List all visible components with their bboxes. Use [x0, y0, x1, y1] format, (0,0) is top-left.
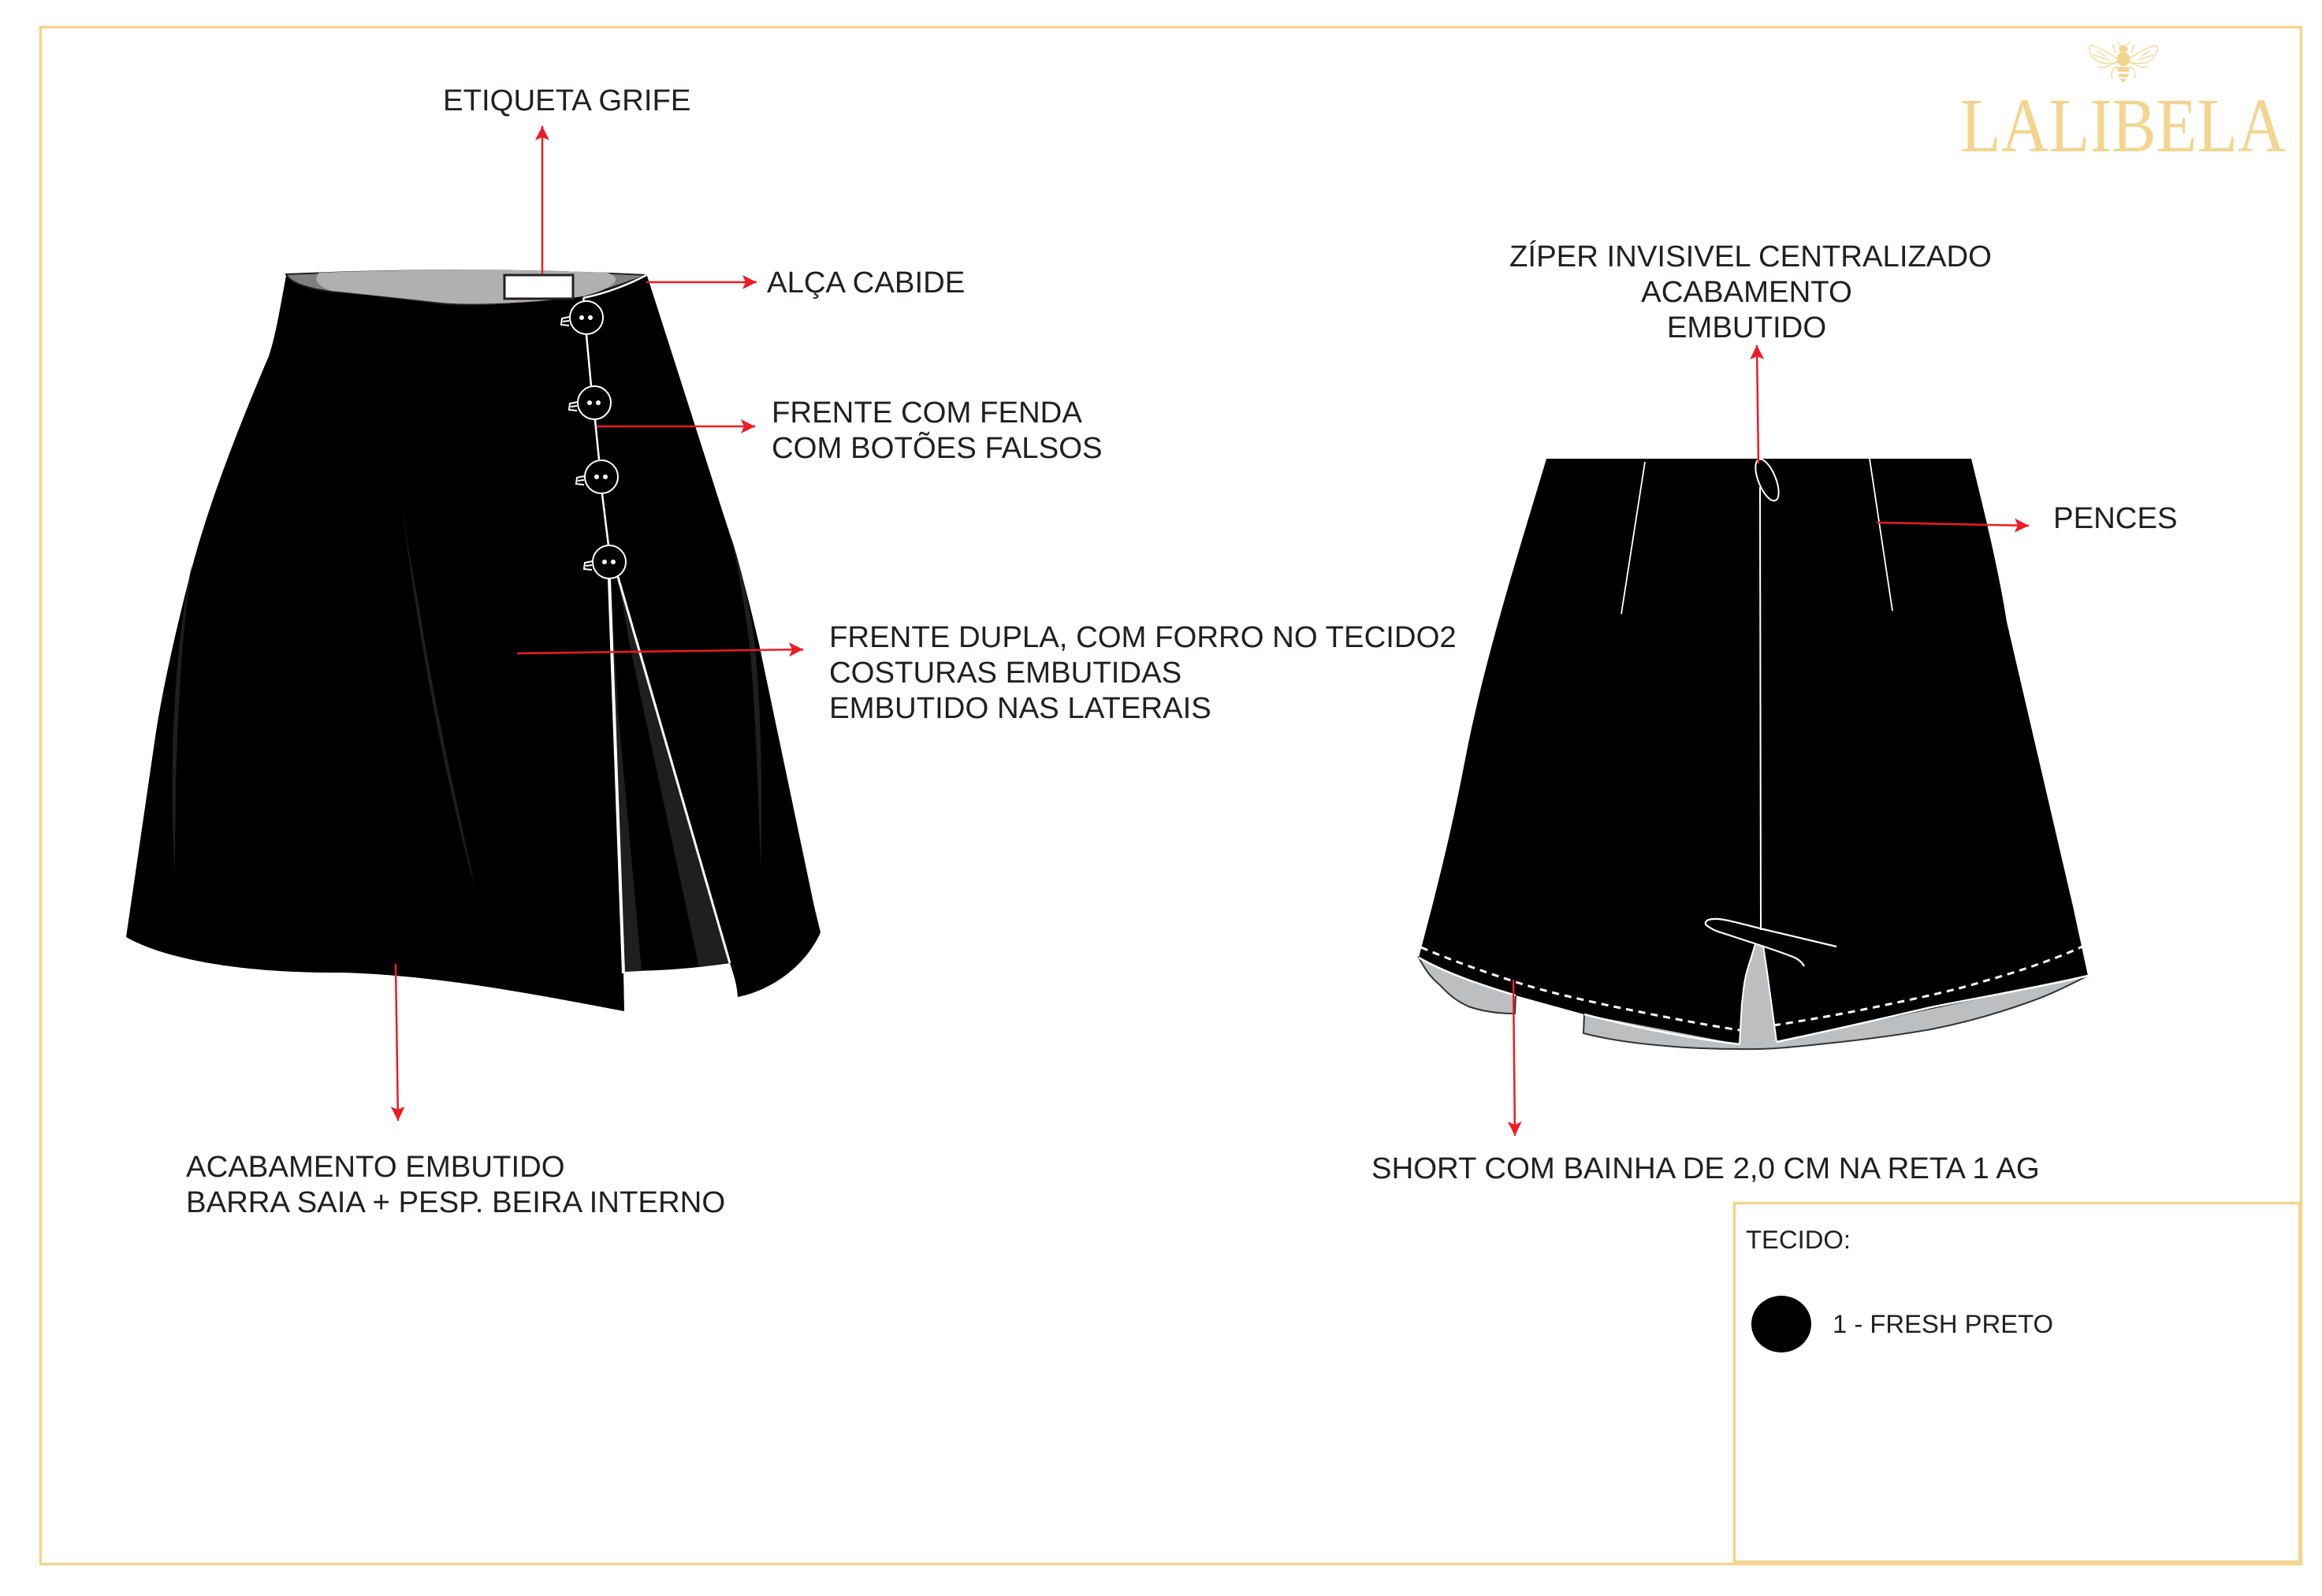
arrow: acabamento embutido [396, 964, 398, 1121]
label: frente dupla: EMBUTIDO NAS LATERAIS [829, 691, 1211, 725]
label: frente dupla [829, 620, 1457, 725]
arrow: short com bainha [1513, 980, 1515, 1136]
label: frente com fenda [772, 396, 1103, 465]
skirt placket seams [583, 298, 730, 973]
fabric swatch [1751, 1296, 1811, 1352]
label: zíper invisível [1509, 240, 1992, 344]
invisible zipper line [1760, 487, 1761, 930]
shorts hem white edges [1419, 958, 2088, 1044]
zipper pull [1751, 456, 1784, 504]
panel: tecido [1734, 1203, 2300, 1562]
arrow: alça cabide [646, 281, 757, 283]
logo: Lalibela [1960, 42, 2286, 168]
button 4 [584, 545, 626, 579]
skirt illustration [126, 270, 821, 1011]
arrow: etiqueta grife [541, 126, 543, 273]
shorts right back hem [1583, 976, 2088, 1049]
skirt waistband [286, 270, 646, 304]
fabric heading: TECIDO: [1746, 1225, 1851, 1254]
label: zíper invisível: EMBUTIDO [1667, 311, 1826, 344]
shorts gusset [1740, 944, 1777, 1048]
fabric name: 1 - FRESH PRETO [1833, 1309, 2053, 1338]
label: alça cabide: ALÇA CABIDE [767, 266, 965, 299]
button 3 [576, 460, 618, 493]
shorts left back hem [1419, 958, 1516, 1014]
label: short com bainha: SHORT COM BAINHA DE 2,0 CM NA RETA 1 AG [1371, 1151, 2040, 1185]
label: acabamento embutido: ACABAMENTO EMBUTIDO [186, 1150, 565, 1184]
skirt designer label [504, 275, 573, 299]
label: frente dupla: FRENTE DUPLA, COM FORRO NO TECIDO2 [829, 620, 1457, 654]
label: acabamento embutido [186, 1150, 725, 1219]
label: pences: PENCES [2053, 501, 2178, 535]
arrow: zíper invisível [1757, 345, 1758, 463]
shorts front flap [1706, 919, 1836, 966]
label: acabamento embutido: BARRA SAIA + PESP. BEIRA INTERNO [186, 1185, 725, 1219]
label: frente dupla: COSTURAS EMBUTIDAS [829, 656, 1181, 690]
button 1 [561, 301, 603, 334]
skirt inner panel shading [173, 453, 761, 972]
shorts illustration [1419, 456, 2088, 1049]
label: etiqueta grife: ETIQUETA GRIFE [443, 84, 690, 117]
label: zíper invisível: ZÍPER INVISIVEL CENTRALIZADO [1509, 240, 1992, 273]
shorts darts [1621, 459, 1892, 614]
label: zíper invisível: ACABAMENTO [1641, 275, 1852, 309]
skirt body [126, 276, 821, 1011]
label: frente com fenda: FRENTE COM FENDA [772, 396, 1082, 430]
button 2 [569, 386, 611, 419]
arrow: frente com fenda [597, 426, 755, 427]
shorts hem stitching [1421, 947, 2082, 1030]
shorts body [1419, 459, 2088, 1044]
arrow: pences [1877, 523, 2029, 526]
icon: bee [2089, 42, 2157, 83]
label: frente com fenda: COM BOTÕES FALSOS [772, 430, 1103, 465]
arrow: frente dupla [517, 649, 803, 653]
